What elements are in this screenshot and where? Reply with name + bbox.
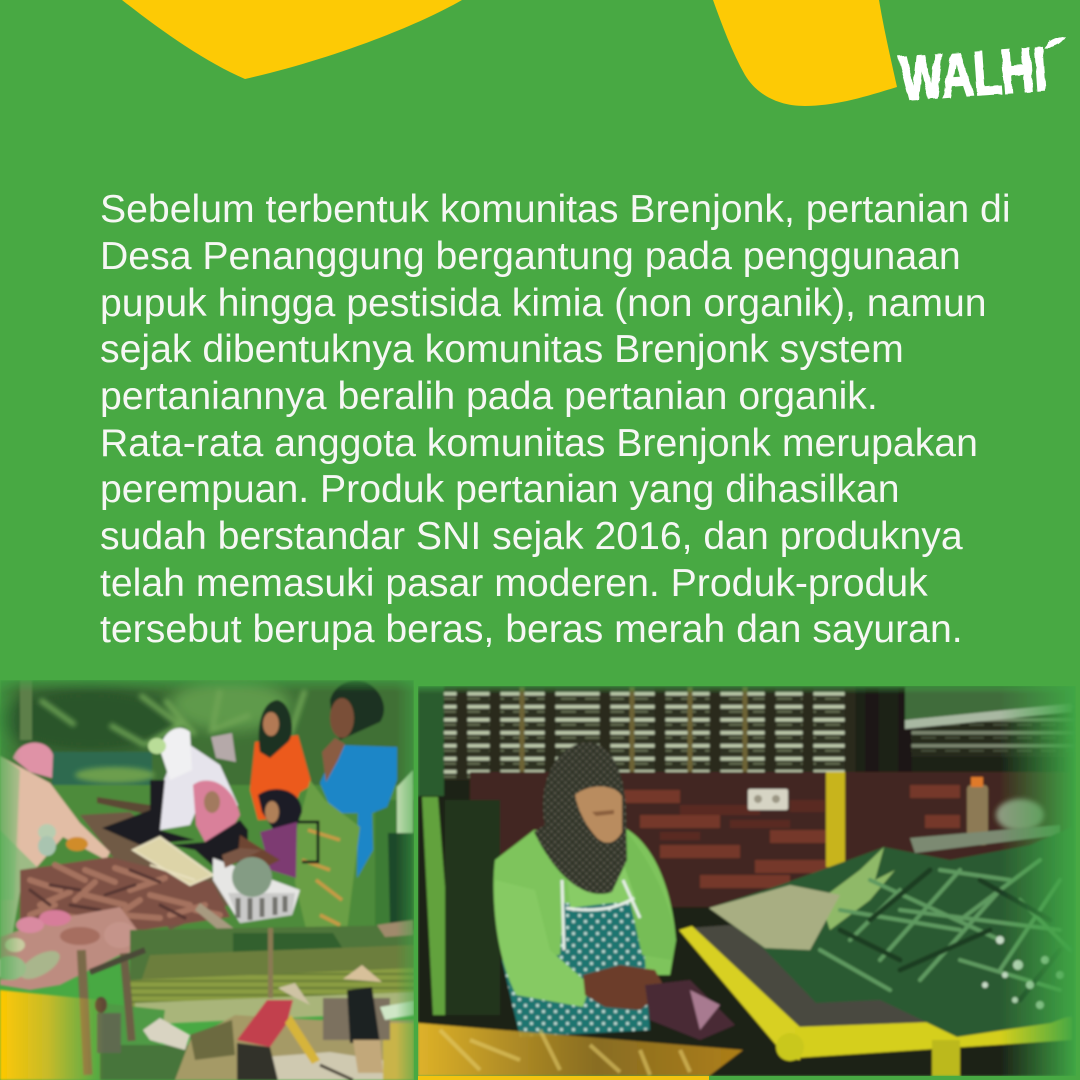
right figure (377, 770, 413, 937)
brick wall (470, 772, 1070, 907)
body text paragraph: Rata-rata anggota komunitas Brenjonk merupakan (100, 422, 978, 465)
photo: women sorting tubers and farmers threshing rice (0, 679, 415, 1080)
box behind farmers (323, 998, 390, 1040)
straw and leaves over yellow overlay (440, 1030, 690, 1075)
decorative yellow shape: top left (122, 0, 462, 79)
woman: pink hijab (170, 780, 248, 868)
rice terraces (130, 925, 414, 1025)
woman: blue shirt with apron (295, 681, 397, 945)
body text paragraph (100, 188, 1011, 651)
farmer in red shirt with hat (237, 983, 353, 1080)
yellow corner overlay (0, 990, 105, 1080)
pumpkins on table (38, 824, 88, 856)
decorative yellow shape: top right (713, 0, 897, 106)
person left in pink (0, 743, 110, 937)
body text paragraph: perempuan. Produk pertanian yang dihasilkan (100, 468, 900, 511)
sweet potatoes (0, 907, 150, 990)
pale strip (380, 1001, 414, 1020)
body text paragraph: pupuk hingga pestisida kimia (non organik), namun (100, 282, 987, 325)
photo: woman sorting vegetables at yellow table (418, 686, 1076, 1076)
table slats (80, 812, 240, 930)
hands holding leaves (583, 965, 735, 1040)
bottle and shelf (910, 777, 1060, 853)
yellow table (679, 925, 1072, 1076)
top green fade (418, 686, 1076, 694)
hut posts and person seated (77, 950, 190, 1080)
straw ground (175, 1015, 414, 1080)
soft fades (0, 680, 20, 980)
foliage background (0, 679, 415, 950)
body text paragraph: sudah berstandar SNI sejak 2016, dan produknya (100, 515, 963, 558)
woman with scarf, green shirt, polka-dot apron (494, 743, 676, 1037)
farmer in dark jacket with hat (343, 965, 383, 1073)
woman: black hijab (238, 789, 302, 878)
wall socket (748, 789, 788, 810)
white basket with pumpkin (213, 848, 300, 923)
woman: orange shirt (250, 700, 312, 820)
body text paragraph: telah memasuki pasar moderen. Produk-produk (100, 562, 928, 605)
dark interior background (418, 686, 1076, 1076)
bottom yellow strip (418, 1076, 709, 1080)
body text paragraph: tersebut berupa beras, beras merah dan sayuran. (100, 608, 963, 651)
bench (97, 797, 150, 815)
yellow overlay bottom left (418, 1023, 743, 1076)
tuber pile (20, 837, 240, 938)
body text paragraph: Desa Penanggung bergantung pada penggunaan (100, 235, 961, 278)
green vegetable pile (709, 827, 1072, 1037)
left green post (420, 795, 447, 1017)
body text paragraph: pertaniannya beralih pada pertanian organik. (100, 375, 878, 418)
yellow pole (826, 772, 845, 867)
bamboo wall (442, 686, 1072, 780)
woman: white hijab (102, 728, 238, 845)
body text paragraph: Sebelum terbentuk komunitas Brenjonk, pertanian di (100, 188, 1011, 231)
right green fade (1000, 686, 1076, 1076)
body text paragraph: sejak dibentuknya komunitas Brenjonk system (100, 328, 904, 371)
